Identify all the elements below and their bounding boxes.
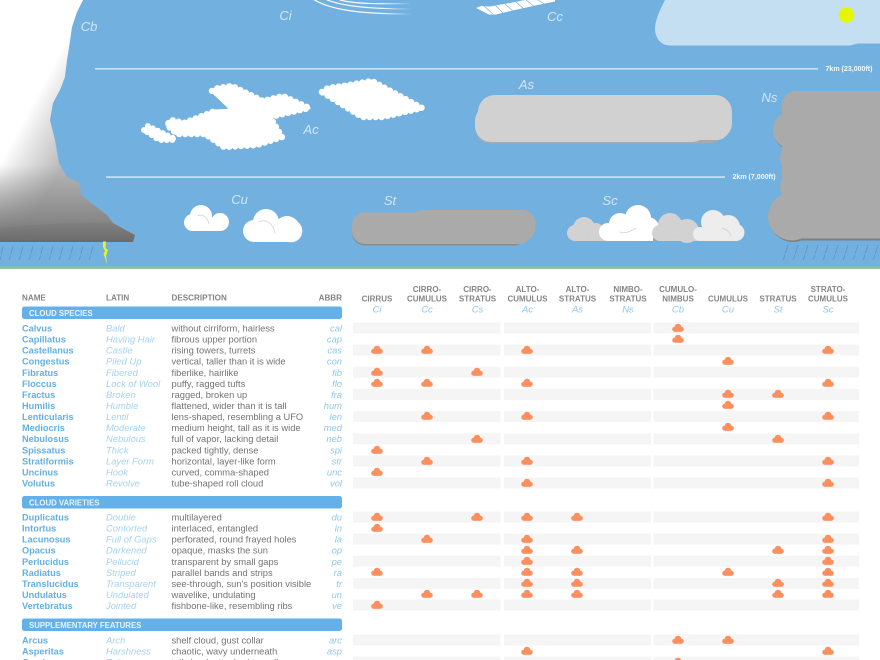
matrix column headings: Cu [722,304,735,316]
panel: species table: Uncinus [22,467,58,477]
matrix column headings: ALTO- [566,285,590,294]
panel: species table: spi [330,444,343,455]
panel: varieties table: du [332,512,343,522]
panel: species table: puffy, ragged tufts [172,379,246,389]
panel: varieties table: perforated, round frayed holes [172,535,297,545]
panel: species table: neb [326,433,342,444]
panel: species table: cas [327,345,342,356]
panel: supplementary table: Arch [105,634,125,646]
label: Ci: Ci [279,8,293,23]
panel: varieties table: wavelike, undulating [170,590,256,600]
matrix column headings: As [571,304,583,316]
panel: species table: full of vapor, lacking detail [172,434,278,444]
matrix column headings: CUMULUS [708,294,749,304]
matrix column headings: NIMBUS [662,294,694,304]
section bar: cloud species: CLOUD SPECIES [29,309,93,318]
table column headings: NAME [22,294,46,302]
panel: varieties table: Striped [106,567,136,578]
cloud: stratus [352,210,536,246]
panel: varieties table: in [335,522,342,534]
cloud: cirrocumulus [476,0,555,14]
panel: species table: Castellanus [22,346,74,356]
panel: supplementary table: Harshness [106,646,151,657]
label: Sc: Sc [602,193,618,208]
panel: species table: Volutus [22,478,55,488]
panel: species table: horizontal, layer-like form [172,456,276,466]
matrix column headings: NIMBO- [613,285,643,294]
label: Cc: Cc [547,9,563,24]
panel: varieties table: ve [332,600,342,611]
cloud: cirrostratus [655,0,880,46]
panel: varieties table: Pellucid [106,556,140,567]
panel: species table: Nebulous [106,433,146,444]
panel: species table: fibrous upper portion [172,335,257,345]
matrix column headings: CUMULO- [659,285,697,294]
panel: species table: Fibered [106,367,139,378]
panel: species table: con [327,356,342,367]
table column headings: DESCRIPTION [172,294,227,302]
panel: species table: curved, comma-shaped [172,467,269,477]
panel: species table: Bald [106,322,126,334]
section bar: cloud varieties [22,496,342,508]
panel: species table: Fibratus [22,368,58,378]
chart: varieties markers [371,513,834,609]
panel: species table: Stratiformis [22,456,74,466]
panel: species table: Floccus [22,379,57,389]
panel: varieties table: Undulatus [22,590,67,600]
panel: varieties table: opaque, masks the sun [172,546,268,556]
panel: species table: Spissatus [22,445,65,455]
panel: species table: str [332,455,343,466]
panel: species table: fra [331,389,342,400]
label: As: As [518,77,535,92]
panel: species table: rising towers, turrets [172,346,256,356]
label: Ns: Ns [762,90,778,105]
panel: supplementary table: chaotic, wavy underneath [172,647,277,657]
panel: species table: Nebulosus [22,434,69,444]
matrix column headings: ALTO- [516,285,540,294]
panel: supplementary table: shelf cloud, gust collar [172,636,264,646]
panel: varieties table: la [335,534,342,545]
cloud: cirrus [313,0,410,14]
panel: varieties table: Intortus [22,524,56,534]
panel: varieties table: un [332,589,342,600]
section bar: supplementary features [22,618,342,631]
panel: species table: Lenticularis [22,412,74,422]
matrix column headings: CUMULUS [407,294,448,304]
matrix column headings: Ns [622,304,634,316]
matrix column headings: Cs [472,304,484,316]
section bar: cloud species [22,306,342,319]
matrix column headings: STRATUS [459,294,497,304]
panel: species table: Humble [106,400,138,411]
panel: varieties table: fishbone-like, resembling ribs [172,601,293,611]
matrix column headings: St [774,304,783,316]
panel: varieties table [22,512,343,611]
panel: varieties table: op [332,545,342,556]
matrix column headings: Ac [521,304,533,316]
clouds: altocumulus [144,81,422,147]
matrix column headings: Sc [822,304,834,316]
panel: species table: Thick [106,444,130,455]
panel: varieties table: see-through, sun's position visible [172,579,311,589]
panel: varieties table: Duplicatus [22,512,69,522]
panel: species table [22,322,343,488]
panel: varieties table: Opacus [22,546,56,556]
matrix column headings: CUMULUS [808,294,849,304]
matrix column headings: CIRRO- [463,285,492,294]
panel: supplementary table: asp [327,646,342,657]
panel: species table: Congestus [22,357,69,367]
panel: supplementary table: Arcus [22,636,48,646]
section bar: supplementary features: SUPPLEMENTARY FEATURES [29,621,141,630]
ground line [0,266,880,269]
panel: varieties table: Contorted [106,522,148,534]
panel: species table: Calvus [22,324,52,334]
panel: supplementary table: arc [329,634,342,646]
panel: species table: fiberlike, hairlike [172,368,238,378]
table column headings: LATIN [106,294,129,302]
panel: species table: len [329,411,342,422]
panel: species table: Lock of Wool [106,378,161,389]
cloud: cumulonimbus [0,0,135,242]
panel: varieties table: interlaced, entangled [172,524,258,534]
matrix column headings [362,285,849,316]
label: St: St [384,193,398,208]
panel: species table: Capillatus [22,335,66,345]
rain under cumulonimbus [0,246,93,261]
panel: species table: hum [324,400,342,411]
panel: species table: Humilis [22,401,55,411]
label: Ac: Ac [302,122,319,137]
matrix column headings: STRATUS [609,294,647,304]
panel: species table: medium height, tall as it is wide [172,423,301,433]
panel: varieties table: Vertebratus [22,601,73,611]
matrix column headings: Cb [672,304,684,316]
panel: species table: Hook [106,466,129,477]
matrix column headings: Cc [421,304,433,316]
panel: varieties table: multilayered [172,512,222,522]
label: Cu: Cu [231,192,248,207]
panel: species table: med [324,422,343,433]
matrix column headings: STRATUS [759,294,797,304]
panel: species table: Layer Form [106,455,154,466]
panel: species table: tube-shaped roll cloud [172,478,263,488]
panel: supplementary table: Asperitas [22,647,64,657]
panel: species table: Fractus [22,390,55,400]
panel: varieties table: ra [334,567,342,578]
altitude line: 2km: 2km (7,000ft) [732,174,776,181]
icon: lightning bolt [103,242,108,264]
panel: species table: unc [327,466,342,477]
panel: species table: without cirriform, hairless [170,324,275,334]
chart: row bands [353,322,859,660]
clouds: cumulus [184,205,302,242]
panel: varieties table: Transparent [106,578,156,589]
panel: varieties table: Double [106,512,136,522]
panel: varieties table: parallel bands and strips [172,568,273,578]
table column headings: ABBR [319,294,342,302]
panel: varieties table: Darkened [106,545,147,556]
cloud: altostratus [475,95,732,144]
panel: varieties table: transparent by small gaps [172,557,279,567]
panel: varieties table: tr [336,578,343,589]
panel: varieties table: Lacunosus [22,535,70,545]
panel: species table: vol [330,478,343,488]
panel: species table: cal [330,322,343,334]
altitude line: 7km: 7km (23,000ft) [826,66,873,73]
panel: species table: packed tightly, dense [172,445,258,455]
matrix column headings: CIRRO- [413,285,442,294]
table column headings [22,294,342,302]
clouds: stratocumulus [567,205,744,243]
section bar: cloud varieties: CLOUD VARIETIES [29,498,99,507]
rain under nimbostratus [783,245,878,261]
icon: sun [839,7,854,23]
panel: species table: Revolve [106,478,140,488]
label: Cb: Cb [81,19,97,34]
chart: species markers [371,324,834,487]
panel: species table: fib [332,367,342,378]
panel: varieties table: pe [331,556,342,567]
panel: species table: flo [332,378,342,389]
matrix column headings: CIRRUS [362,294,393,304]
cloud: nimbostratus [768,91,880,242]
panel: species table: Moderate [106,422,146,433]
panel: species table: Castle [106,345,133,356]
matrix column headings: CUMULUS [508,294,548,304]
panel: varieties table: Radiatus [22,568,61,578]
panel: species table: Lentil [106,411,129,422]
matrix column headings: STRATUS [559,294,597,304]
panel: varieties table: Translucidus [22,579,79,589]
panel: species table: Piled Up [106,356,141,367]
panel: species table: Mediocris [22,423,65,433]
matrix column headings: Ci [373,304,382,316]
matrix column headings: STRATO- [811,285,846,294]
panel: species table: cap [327,334,342,345]
panel: varieties table: Full of Gaps [106,534,157,545]
panel: species table: vertical, taller than it is wide [172,357,286,367]
chart: supplementary markers [521,636,834,660]
sky background [0,0,880,267]
panel: varieties table: Perlucidus [22,557,69,567]
panel: species table: lens-shaped, resembling a UFO [172,412,303,422]
panel: species table: ragged, broken up [172,390,247,400]
panel: supplementary table [22,634,343,660]
panel: species table: Having Hair [106,334,156,345]
panel: varieties table: Undulated [106,589,150,600]
panel: varieties table: Jointed [105,600,137,611]
panel: species table: Broken [106,389,136,400]
panel: species table: flattened, wider than it is tall [172,401,287,411]
